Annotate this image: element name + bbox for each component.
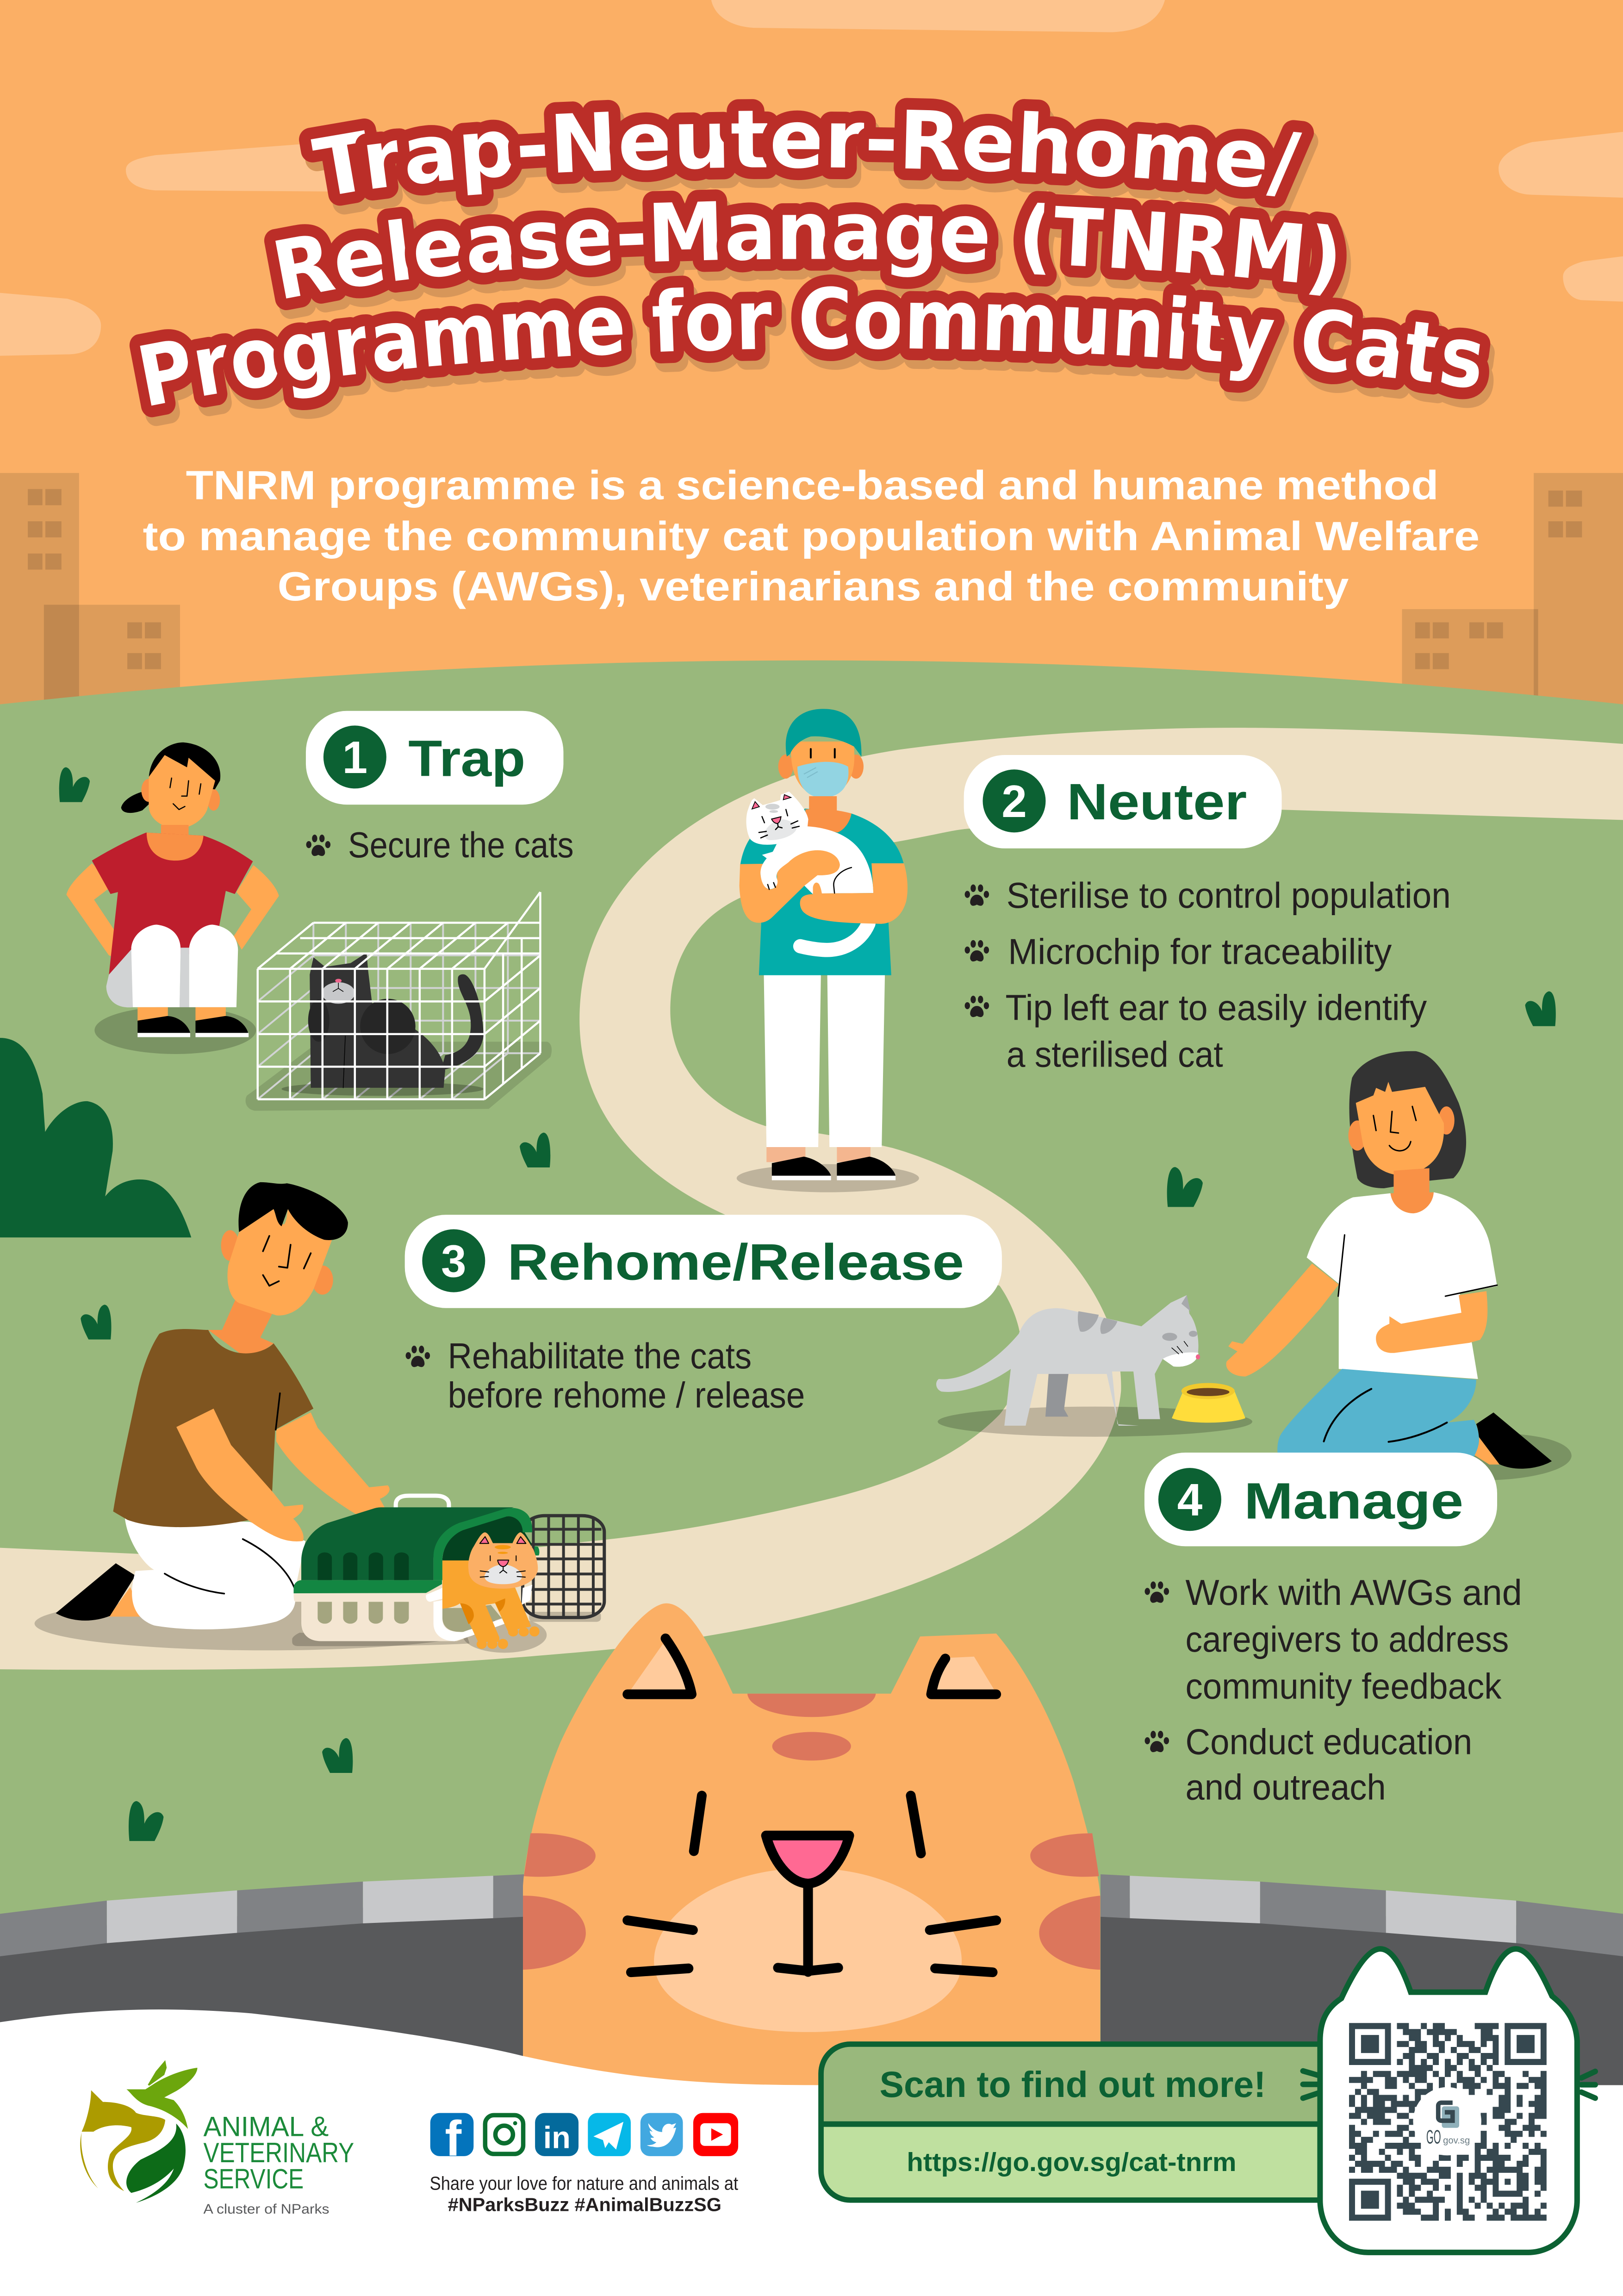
share text [429,2173,739,2215]
Animal & Veterinary Service logo: SERVICE [204,2163,304,2195]
step 4: Manage: Manage [1244,1472,1463,1529]
step 2: Neuter [964,755,1451,1074]
step 3: Rehome/Release: before rehome / release [448,1376,805,1416]
step 4: Manage: Conduct education [1185,1722,1472,1762]
bush [0,1038,191,1237]
pet carrier and orange cat [292,1507,604,1653]
step 2: Neuter: a sterilised cat [1007,1035,1223,1074]
Animal & Veterinary Service logo [80,2060,354,2217]
Animal & Veterinary Service logo: VETERINARY [204,2137,354,2168]
step 3: Rehome/Release: Rehabilitate the cats [448,1336,752,1376]
road with kerb [0,1874,1623,2094]
intro text: TNRM programme is a science-based and humane method [186,462,1439,508]
intro text [143,462,1480,609]
buildings skyline [0,473,1623,726]
Animal & Veterinary Service logo: ANIMAL & [204,2111,329,2142]
share text: Share your love for nature and animals at [429,2173,739,2194]
step 4: Manage: Work with AWGs and [1185,1573,1522,1613]
step 4: Manage: caregivers to address [1185,1620,1509,1660]
beige winding path [0,728,1623,1670]
icon: Twitter [640,2113,683,2156]
social media icons [430,2110,738,2166]
vet holding white cat (Neuter) [737,709,919,1192]
big orange cat [523,1603,1100,2126]
scan panel: Scan to find out more! [880,2064,1266,2105]
title [130,93,1491,426]
step 1: Trap [306,711,574,865]
QR code: GO [1426,2126,1441,2147]
Animal & Veterinary Service logo: A cluster of NParks [204,2202,330,2217]
grey cat [936,1295,1245,1426]
scan panel: https://go.gov.sg/cat-tnrm [907,2147,1237,2177]
icon: LinkedIn: in [543,2121,571,2155]
scan panel [821,2044,1377,2200]
icon: Instagram [485,2115,523,2154]
step 2: Neuter: Sterilise to control population [1007,876,1451,916]
woman crouching (Trap) [66,742,279,1054]
intro text: to manage the community cat population with Animal Welfare [143,513,1480,559]
title: Trap-Neuter-Rehome/ [308,93,1304,217]
woman figure [1226,1051,1497,1379]
step 1: Trap: Secure the cats [348,825,574,865]
title: Release-Manage (TNRM) [266,185,1347,319]
step 2: Neuter: Tip left ear to easily identify [1006,988,1427,1028]
green hill [0,661,1623,2094]
QR code: gov.sg [1443,2135,1470,2146]
step 2: Neuter: 2 [1001,776,1027,827]
grass tufts [59,767,1556,1841]
step 3: Rehome/Release [405,1215,1002,1416]
clouds [0,0,1623,356]
step 1: Trap: 1 [342,732,367,783]
share text: #NParksBuzz #AnimalBuzzSG [448,2194,721,2215]
icon: LinkedIn [535,2113,578,2156]
logo mark [80,2060,197,2203]
man with carrier (Rehome/Release) [35,1182,604,1653]
step 3: Rehome/Release: 3 [441,1235,466,1286]
title: Programme for Community Cats [130,271,1491,426]
white footer wave [0,2009,1623,2296]
step 2: Neuter: Neuter [1067,774,1247,830]
step 3: Rehome/Release: Rehome/Release [507,1234,964,1291]
step 4: Manage: and outreach [1185,1768,1386,1808]
icon: Facebook: f [445,2110,462,2166]
step 2: Neuter: Microchip for traceability [1008,932,1392,972]
icon: Facebook [430,2110,473,2166]
step 1: Trap: Trap [408,730,525,787]
woman feeding cat (Manage) [936,1051,1572,1480]
step 4: Manage: 4 [1177,1474,1202,1525]
icon: Telegram [588,2113,631,2156]
QR code [1349,2026,1547,2218]
feeding shadows [938,1407,1252,1437]
QR cat card [1303,1949,1595,2252]
step 4: Manage: community feedback [1185,1666,1502,1706]
icon: YouTube [693,2113,738,2156]
step 4: Manage [1144,1453,1522,1808]
intro text: Groups (AWGs), veterinarians and the community [278,563,1349,609]
cage with black cat [246,892,552,1111]
